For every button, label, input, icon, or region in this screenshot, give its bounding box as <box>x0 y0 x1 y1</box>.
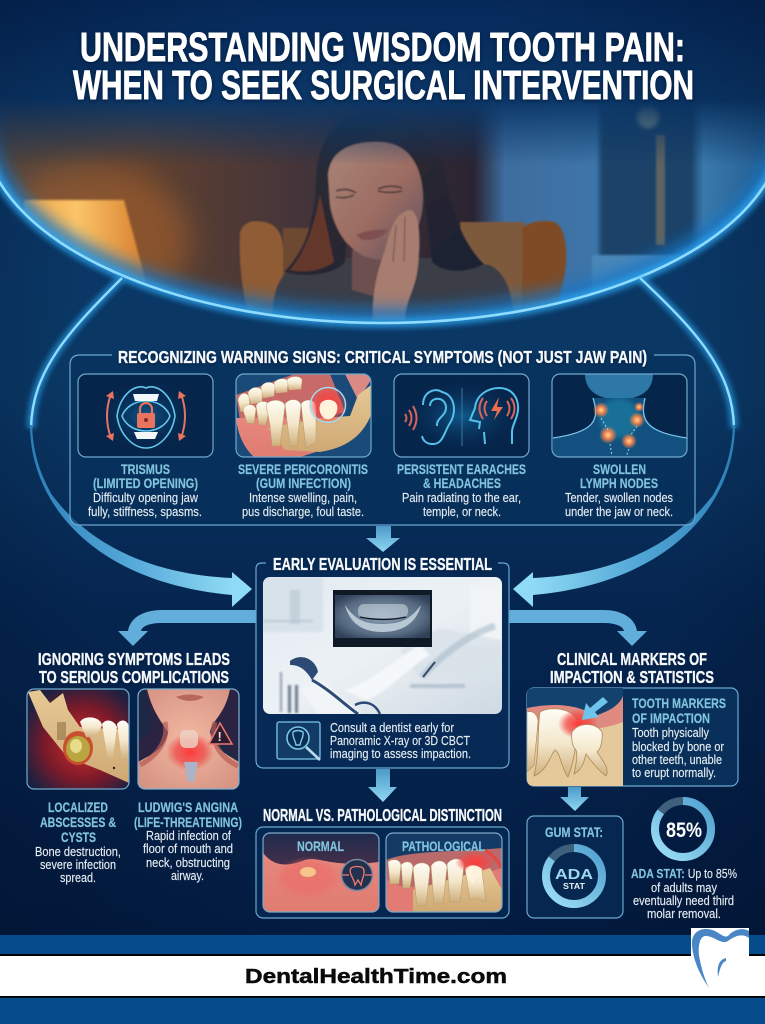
right flow arrow into early evaluation <box>513 278 735 607</box>
heading: normal vs pathological: NORMAL VS. PATHOLOGICAL DISTINCTION <box>263 805 502 825</box>
image: impacted molar <box>527 688 623 786</box>
left flow arrow into early evaluation <box>30 278 252 607</box>
left branch arrow to complications <box>118 610 256 646</box>
symptom card: earaches and headaches <box>394 374 529 457</box>
arrow: evaluation to distinction <box>368 769 397 802</box>
label: gum stat: GUM STAT: <box>545 824 603 840</box>
text: Ludwig's angina: airway. <box>171 868 204 883</box>
text: ADA stat: molar removal. <box>647 906 721 921</box>
icon: x-ray magnifier <box>277 722 320 760</box>
text: tooth markers: Tooth physically <box>632 725 710 740</box>
heading: early evaluation: EARLY EVALUATION IS ESSENTIAL <box>273 554 492 574</box>
heading: warning signs: RECOGNIZING WARNING SIGNS: CRITICAL SYMPTOMS (NOT JUST JAW PAIN) <box>118 347 647 367</box>
text: ADA stat: ADA STAT: Up to 85% <box>631 866 737 881</box>
image card: abscess in jawbone <box>27 689 129 789</box>
text: pericoronitis <box>238 461 368 519</box>
text: Ludwig's angina: (LIFE-THREATENING) <box>134 814 242 830</box>
donut: ADA stat <box>546 848 602 904</box>
text: consult a dentist: Panoramic X-ray or 3D CBCT <box>330 733 470 748</box>
text: earaches: Pain radiating to the ear, <box>402 490 521 505</box>
image card: Ludwig's angina neck: ! <box>218 729 222 744</box>
footer band <box>0 935 765 1024</box>
symptom card: swollen lymph nodes <box>552 374 687 457</box>
text: trismus: TRISMUS <box>121 461 170 477</box>
clinic photo with panoramic x-ray <box>263 577 502 714</box>
text: abscesses and cysts: LOCALIZED <box>48 799 108 815</box>
text: lymph nodes: Tender, swollen nodes <box>565 490 673 505</box>
text: pericoronitis: Intense swelling, pain, <box>249 490 357 505</box>
text: lymph nodes: under the jaw or neck. <box>565 504 673 519</box>
text: pericoronitis: SEVERE PERICORONITIS <box>238 461 368 477</box>
right branch arrow to markers <box>509 610 647 646</box>
text: consult a dentist: imaging to assess impaction. <box>330 746 471 761</box>
text: abscesses and cysts <box>35 799 121 885</box>
text: abscesses and cysts: Bone destruction, <box>35 844 121 859</box>
text: ADA stat: of adults may <box>651 880 718 895</box>
text: pericoronitis: pus discharge, foul taste. <box>242 504 364 519</box>
text: abscesses and cysts: severe infection <box>40 857 116 872</box>
text: Ludwig's angina: floor of mouth and <box>143 841 233 856</box>
text: ADA stat: eventually need third <box>633 893 734 908</box>
panel: gum stat <box>527 816 623 918</box>
image card: pathological teeth <box>386 833 502 912</box>
image card: Ludwig's angina neck <box>138 689 240 789</box>
text: tooth markers: other teeth, unable <box>632 752 722 767</box>
panel: warning signs <box>70 347 695 525</box>
heading: clinical markers: CLINICAL MARKERS OF <box>557 649 707 669</box>
label: pathological: PATHOLOGICAL <box>402 838 485 854</box>
hero photo: woman holding her jaw <box>0 106 765 322</box>
text: Ludwig's angina <box>134 799 242 883</box>
text: earaches: temple, or neck. <box>423 504 501 519</box>
text: consult a dentist <box>330 720 471 761</box>
text: tooth markers <box>632 695 726 780</box>
arrow: markers to gum stat <box>560 787 589 811</box>
text: Ludwig's angina: Rapid infection of <box>146 828 231 843</box>
donut: 85 percent <box>655 801 711 857</box>
text: tooth markers: to erupt normally. <box>632 765 716 780</box>
text: earaches: & HEADACHES <box>423 475 501 491</box>
text: abscesses and cysts: CYSTS <box>61 829 96 845</box>
donut: 85 percent: 85% <box>666 819 702 842</box>
glowing lens outline <box>0 126 765 323</box>
text: tooth markers: OF IMPACTION <box>632 710 710 726</box>
symptom card: pericoronitis <box>236 372 371 457</box>
text: lymph nodes: SWOLLEN <box>593 461 646 477</box>
panel: early evaluation <box>256 554 509 768</box>
text: trismus: Difficulty opening jaw <box>93 490 199 505</box>
text: lymph nodes <box>565 461 673 519</box>
title <box>73 24 694 108</box>
arrow: symptoms to evaluation <box>366 526 400 552</box>
heading: clinical markers <box>550 649 714 687</box>
text: Ludwig's angina: LUDWIG'S ANGINA <box>138 799 238 815</box>
donut: ADA stat: STAT <box>563 882 585 891</box>
text: lymph nodes: LYMPH NODES <box>580 475 658 491</box>
text: trismus: fully, stiffness, spasms. <box>88 504 202 519</box>
label: normal: NORMAL <box>297 838 344 854</box>
symptom card: trismus <box>78 374 213 457</box>
text: earaches: PERSISTENT EARACHES <box>397 461 526 477</box>
text: tooth markers: blocked by bone or <box>632 739 725 754</box>
text: abscesses and cysts: ABSCESSES & <box>40 814 116 830</box>
heading: clinical markers: IMPACTION & STATISTICS <box>550 667 714 687</box>
heading: complications: IGNORING SYMPTOMS LEADS <box>38 649 230 669</box>
text: Ludwig's angina: neck, obstructing <box>146 855 230 870</box>
text: trismus <box>88 461 202 519</box>
text: trismus: (LIMITED OPENING) <box>93 475 198 491</box>
text: abscesses and cysts: spread. <box>60 870 96 885</box>
donut: ADA stat: ADA <box>555 866 593 883</box>
panel: tooth markers of impaction <box>527 688 738 786</box>
text: consult a dentist: Consult a dentist early for <box>330 720 455 735</box>
text: ADA stat <box>631 866 737 921</box>
image card: normal gum <box>263 833 379 912</box>
heading: complications: TO SERIOUS COMPLICATIONS <box>39 667 229 687</box>
panel: normal vs pathological <box>256 827 509 918</box>
logo: tooth <box>691 928 749 988</box>
text: pericoronitis: (GUM INFECTION) <box>256 475 351 491</box>
website name: DentalHealthTime.com <box>245 965 507 988</box>
text: tooth markers: TOOTH MARKERS <box>632 695 726 711</box>
heading: complications <box>38 649 230 687</box>
text: earaches <box>397 461 526 519</box>
